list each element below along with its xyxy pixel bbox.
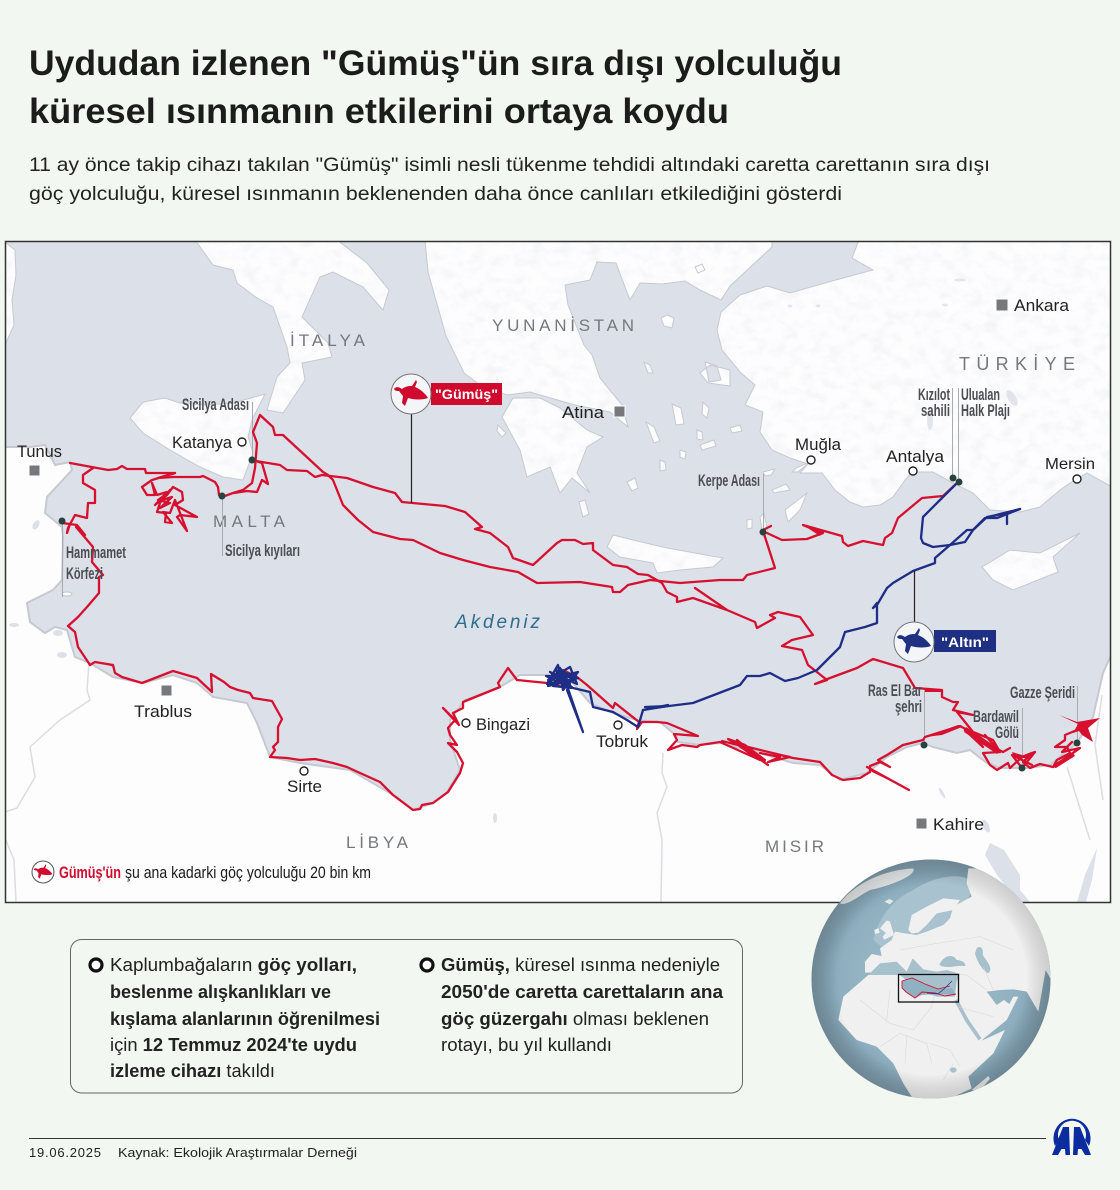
- Muğla: Muğla: [795, 435, 842, 454]
- site labels: Kızılot: [918, 386, 950, 404]
- country labels: YUNANİSTAN: [492, 316, 634, 335]
- Caspian Sea: [975, 947, 990, 973]
- bullet 1 text: beslenme alışkanlıkları ve: [110, 982, 331, 1002]
- bullet 1 text: Kaplumbağaların göç yolları,: [110, 955, 357, 975]
- Aegean islands: [497, 264, 810, 537]
- site labels: Sicilya kıyıları: [225, 542, 300, 560]
- northern land: Italy, Sicily, Greece, Türkiye: [5, 240, 1112, 590]
- site markers: [58, 456, 1080, 772]
- site labels: [66, 386, 1075, 742]
- country labels: MISIR: [765, 837, 824, 856]
- subtitle text: göç yolculuğu, küresel ısınmanın beklenenden daha önce canlıları etkilediğini gösterdi: [29, 184, 842, 205]
- panel: map: [5, 240, 1112, 905]
- country labels: İTALYA: [290, 331, 366, 350]
- site labels: Halk Plajı: [961, 402, 1010, 420]
- Scandinavia: [908, 898, 960, 933]
- site labels: Kerpe Adası: [698, 472, 760, 490]
- subtitle text: [29, 155, 990, 205]
- bullet 2 text: [421, 955, 724, 1055]
- east Sicily loop: [234, 461, 268, 493]
- route: Altın (blue): [546, 483, 1020, 732]
- country borders: [860, 937, 1013, 1080]
- Trablus: [134, 685, 192, 721]
- icon: blue turtle: [897, 628, 931, 654]
- East African lake: [950, 1067, 957, 1073]
- site labels: Ulualan: [961, 386, 1000, 404]
- Katanya: Katanya: [172, 433, 233, 452]
- Tobruk: Tobruk: [596, 732, 649, 751]
- Tunisian and North African inland water: [9, 519, 1097, 902]
- inset map extent with routes: [898, 974, 958, 1002]
- panel: info box: [70, 940, 742, 1093]
- sea: [6, 242, 1110, 902]
- Kahire: Kahire: [933, 815, 984, 834]
- sea label: Akdeniz: Akdeniz: [454, 612, 540, 633]
- footer: date and source: [29, 1145, 357, 1160]
- bullet 1 text: [90, 955, 380, 1081]
- site labels: Gölü: [995, 724, 1019, 742]
- country labels: TÜRKİYE: [959, 354, 1075, 374]
- borders: [5, 663, 1103, 902]
- Mersin: [1045, 456, 1095, 483]
- legend: journey distance: Gümüş'ün: [59, 864, 121, 882]
- Egypt coast bundles: [722, 739, 765, 760]
- title: küresel ısınmanın etkilerini ortaya koydu: [29, 92, 729, 131]
- bullet 1 text: izleme cihazı takıldı: [110, 1061, 275, 1081]
- Ankara: Ankara: [1014, 296, 1070, 315]
- site labels: sahili: [921, 402, 950, 420]
- Mediterranean: [868, 958, 960, 997]
- Greenland and Iceland: [840, 868, 914, 904]
- Eurasia, Arabia and Africa: [838, 868, 1057, 1099]
- globe locator: [812, 860, 1057, 1099]
- callout: Gümüş turtle: [391, 374, 502, 503]
- leader lines: [62, 388, 1078, 768]
- bullet 2 text: Gümüş, küresel ısınma nedeniyle: [441, 955, 720, 975]
- country labels: LİBYA: [346, 833, 409, 852]
- Atlantic shelf: [873, 876, 972, 953]
- site labels: şehri: [895, 698, 922, 716]
- Libyan coast knot: [546, 665, 583, 732]
- Black Sea: [939, 956, 965, 967]
- site labels: Bardawil: [973, 708, 1019, 726]
- route: Gümüş (red): [62, 415, 1080, 810]
- footer: date and source: 19.06.2025: [29, 1145, 101, 1160]
- bullet 2 text: göç güzergahı olması beklenen: [441, 1009, 709, 1029]
- legend: journey distance: [32, 861, 371, 883]
- Britain: [874, 920, 894, 940]
- Tunus: Tunus: [17, 442, 62, 461]
- bullet 2 text: 2050'de caretta carettaların ana: [441, 982, 724, 1002]
- city labels: [17, 296, 1095, 834]
- map frame: [6, 242, 1110, 902]
- Sirte: Sirte: [287, 777, 322, 796]
- bullet 1 text: için 12 Temmuz 2024'te uydu: [110, 1035, 357, 1055]
- callout: Gümüş turtle: "Gümüş": [435, 386, 498, 402]
- icon: red turtle: [394, 380, 428, 406]
- offshore spike near Port Said: [867, 767, 909, 790]
- logo: AA: [1052, 1119, 1091, 1155]
- legend: journey distance: şu ana kadarki göç yolculuğu 20 bin km: [125, 864, 371, 882]
- site labels: Sicilya Adası: [182, 396, 249, 414]
- site labels: Ras El Bar: [868, 682, 922, 700]
- callout: Altın turtle: [894, 571, 996, 662]
- Tobruk: [596, 721, 649, 751]
- Antalya: [886, 447, 945, 475]
- country labels: MALTA: [213, 512, 286, 531]
- Sirte: [287, 767, 322, 796]
- title: [29, 44, 842, 131]
- lakes: [788, 278, 1020, 430]
- subtitle text: 11 ay önce takip cihazı takılan "Gümüş" isimli nesli tükenme tehdidi altındaki caretta carettanın sıra dışı: [29, 155, 990, 176]
- bullet 1 text: kışlama alanlarının öğrenilmesi: [110, 1009, 380, 1029]
- Mersin: Mersin: [1045, 456, 1095, 473]
- footer: date and source: Kaynak: Ekolojik Araştırmalar Derneği: [118, 1145, 357, 1160]
- route bundles (thick sections): [101, 525, 1100, 790]
- Bingazi: Bingazi: [476, 715, 530, 734]
- site labels: Gazze Şeridi: [1010, 684, 1075, 702]
- Atina: Atina: [562, 403, 605, 422]
- Madagascar: [972, 1076, 990, 1091]
- bullet 2 text: rotayı, bu yıl kullandı: [441, 1035, 612, 1055]
- title: Uydudan izlenen "Gümüş"ün sıra dışı yolculuğu: [29, 44, 842, 83]
- site labels: Körfezi: [66, 565, 103, 583]
- Muğla: [795, 435, 842, 464]
- Atina: [562, 403, 625, 422]
- callout: Altın turtle: "Altın": [941, 634, 989, 650]
- site labels: Hammamet: [66, 544, 126, 562]
- African land: [5, 445, 1112, 905]
- footer rule: [29, 1138, 1046, 1140]
- Antalya: Antalya: [886, 447, 945, 466]
- Sicily strait foraging tangle: [142, 473, 197, 531]
- Trablus: Trablus: [134, 702, 192, 721]
- country labels: [213, 316, 1075, 856]
- Red Sea: [956, 1000, 980, 1039]
- Tunus: [17, 442, 62, 476]
